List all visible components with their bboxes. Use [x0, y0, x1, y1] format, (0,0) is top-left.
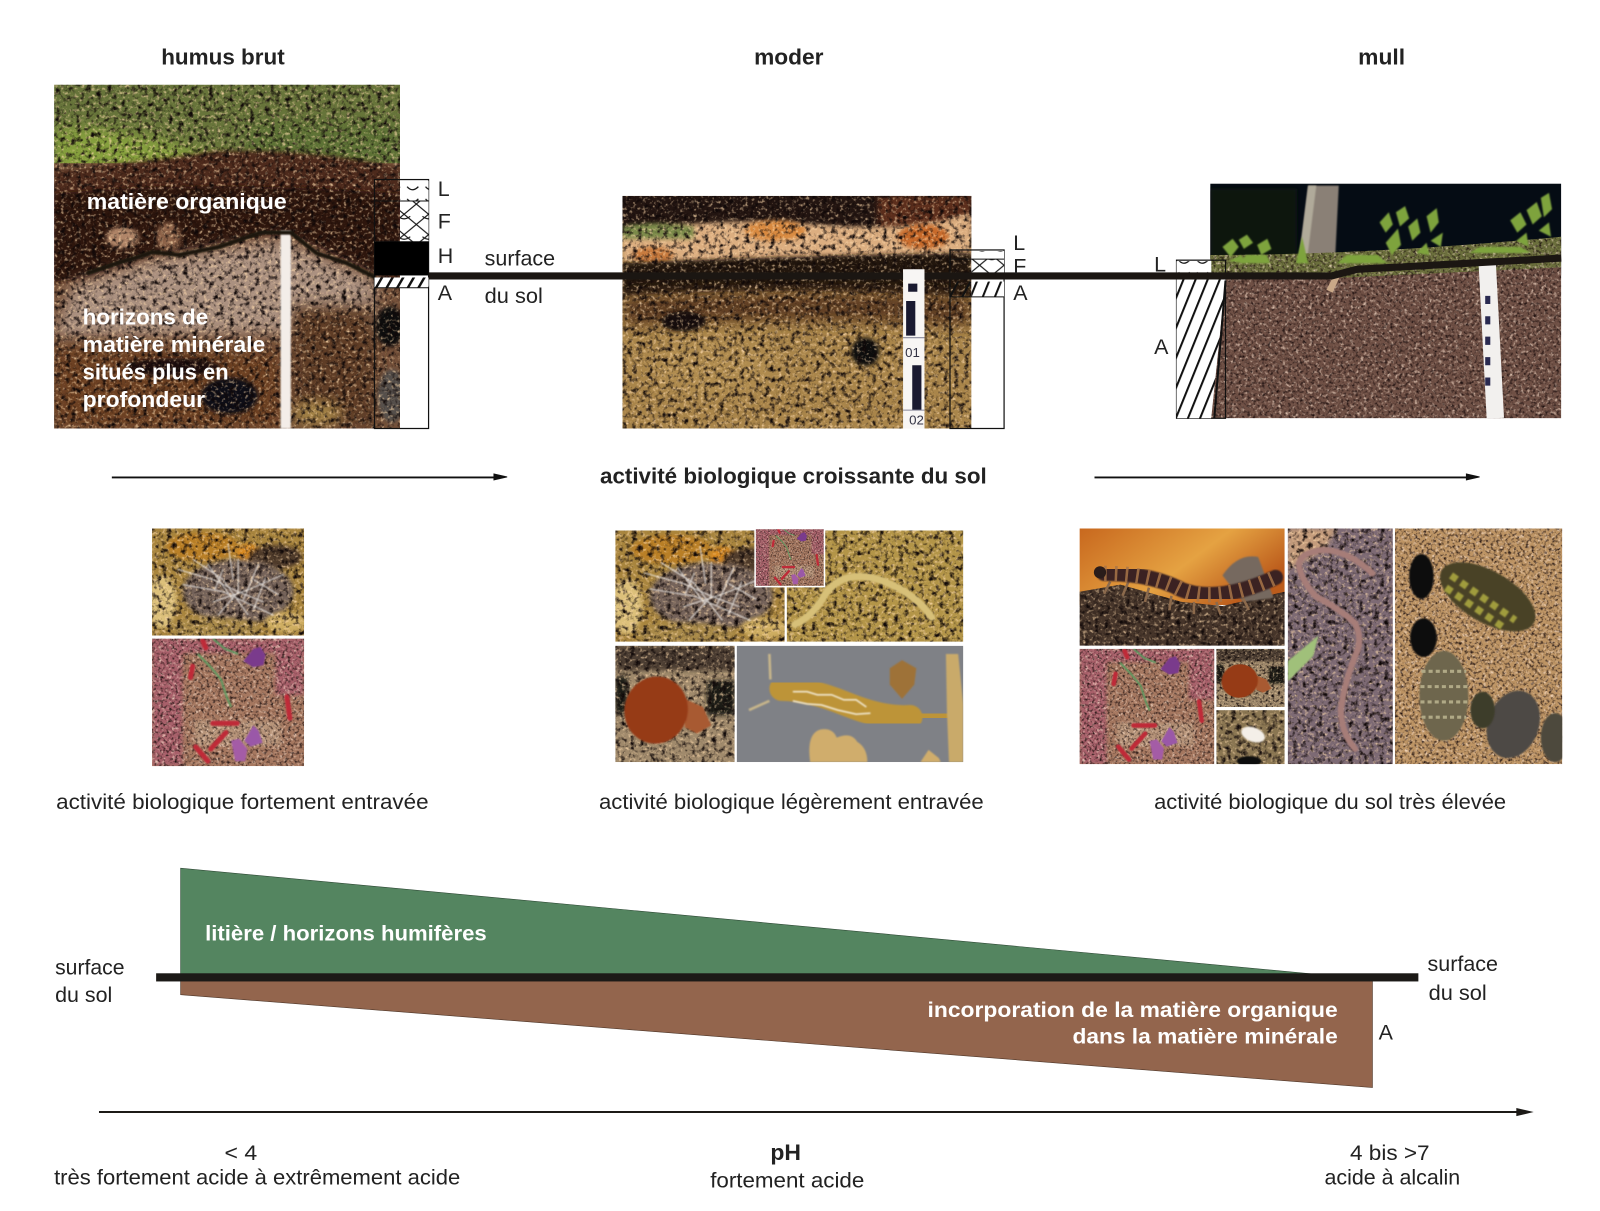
label: horizons de matière minérale: profondeur [83, 387, 205, 412]
label: surface du sol left: surface [55, 955, 124, 979]
pH scale: center: fortement acide [710, 1169, 864, 1193]
soil surface bar [156, 973, 1418, 981]
label: surface du sol: surface [485, 246, 555, 270]
photo: springtail larva [736, 646, 964, 762]
label: horizons de matière minérale: horizons de [83, 304, 208, 329]
photo: mite 2 [1216, 649, 1285, 707]
photo: millipede [1080, 528, 1285, 646]
photo: humus brut soil profile [54, 85, 406, 428]
label: surface du sol right: du sol [1429, 981, 1487, 1005]
label: surface du sol [485, 246, 555, 308]
photo: woodlice [1394, 528, 1562, 764]
photo: moder soil profile [622, 196, 971, 428]
label: horizons de matière minérale [83, 304, 265, 412]
labels: moder horizons: A [1013, 281, 1028, 305]
green wedge: litter and humus horizons [181, 868, 1316, 974]
pH scale: right: 4 bis >7 [1350, 1141, 1430, 1165]
heading: moder: moder [754, 44, 824, 69]
caption: activité très élevée: activité biologique du sol très élevée [1154, 790, 1506, 814]
label: surface du sol right: surface [1428, 952, 1498, 976]
label: horizons de matière minérale: matière minérale [83, 332, 265, 357]
horizon labels: L F H A: L [438, 177, 450, 201]
label: matière organique: matière organique [87, 189, 287, 214]
brown wedge: incorporated organic matter [181, 980, 1372, 1088]
label: surface du sol right [1428, 952, 1498, 1005]
photo group: mull organisms [1080, 528, 1569, 766]
horizon column: moder [950, 250, 1004, 428]
caption: activité légèrement entravée: activité biologique légèrement entravée [599, 790, 984, 814]
horizon labels: L F H A: F [438, 210, 451, 234]
pH scale: center [710, 1140, 864, 1193]
pH scale: right [1324, 1141, 1460, 1189]
labels: moder horizons: F [1013, 254, 1026, 278]
label: litière / horizons humifères: litière / horizons humifères [205, 922, 487, 946]
photo: moder soil profile: 01 [905, 345, 920, 360]
label: incorporation de la matière organique [928, 998, 1338, 1049]
label: incorporation de la matière organique: dans la matière minérale [1072, 1025, 1338, 1049]
horizon column: humus brut [374, 180, 429, 428]
arrow: left biological activity [112, 474, 507, 480]
pH scale: left: < 4 [224, 1141, 257, 1165]
label: surface du sol: du sol [485, 284, 543, 308]
photo: bacteria inset [755, 528, 824, 587]
labels: mull horizons [1154, 252, 1169, 359]
pH scale: left: très fortement acide à extrêmement acide [54, 1165, 460, 1189]
horizon column: mull [1177, 260, 1226, 418]
label: incorporation de la matière organique: incorporation de la matière organique [928, 998, 1338, 1022]
heading: humus brut: humus brut [161, 44, 285, 69]
photo: earthworm [1288, 528, 1393, 764]
ruler overlap: moder [903, 269, 924, 284]
labels: moder horizons: L [1013, 231, 1025, 255]
arrow: pH axis [99, 1108, 1534, 1116]
soil surface line [429, 258, 1561, 276]
photo: fungal hyphae [148, 528, 306, 638]
photo: mull soil profile [1210, 184, 1561, 419]
label: horizons de matière minérale: situés plus en [83, 360, 229, 385]
label: surface du sol left [55, 955, 124, 1007]
label: activité biologique croissante du sol: activité biologique croissante du sol [600, 464, 987, 489]
photo: bacteria [152, 639, 304, 766]
pH scale: left [54, 1141, 460, 1189]
horizon labels: L F H A [438, 177, 453, 305]
photo: oribatid mite [615, 646, 735, 762]
label: surface du sol left: du sol [55, 983, 112, 1007]
photo: moder soil profile: 02 [909, 412, 924, 427]
labels: moder horizons [1013, 231, 1028, 305]
caption: activité fortement entravée: activité biologique fortement entravée [56, 790, 429, 814]
photo group: moder organisms [611, 528, 963, 762]
pH scale: right: acide à alcalin [1324, 1165, 1460, 1189]
labels: mull horizons: A [1154, 335, 1169, 359]
heading: mull: mull [1358, 44, 1405, 69]
horizon labels: L F H A: H [438, 244, 453, 268]
photo group: humus brut organisms [148, 528, 306, 766]
photo: fungal hyphae 2 [611, 531, 787, 644]
horizon labels: L F H A: A [438, 281, 453, 305]
photo: egg [1216, 710, 1285, 764]
photo: bacteria 2 [1080, 649, 1214, 764]
pH scale: center: pH [770, 1140, 801, 1165]
labels: mull horizons: L [1154, 252, 1166, 276]
arrow: right biological activity [1095, 474, 1480, 480]
label: A: A [1379, 1021, 1394, 1045]
photo: tan soil with enchytraeid worm [786, 530, 964, 642]
